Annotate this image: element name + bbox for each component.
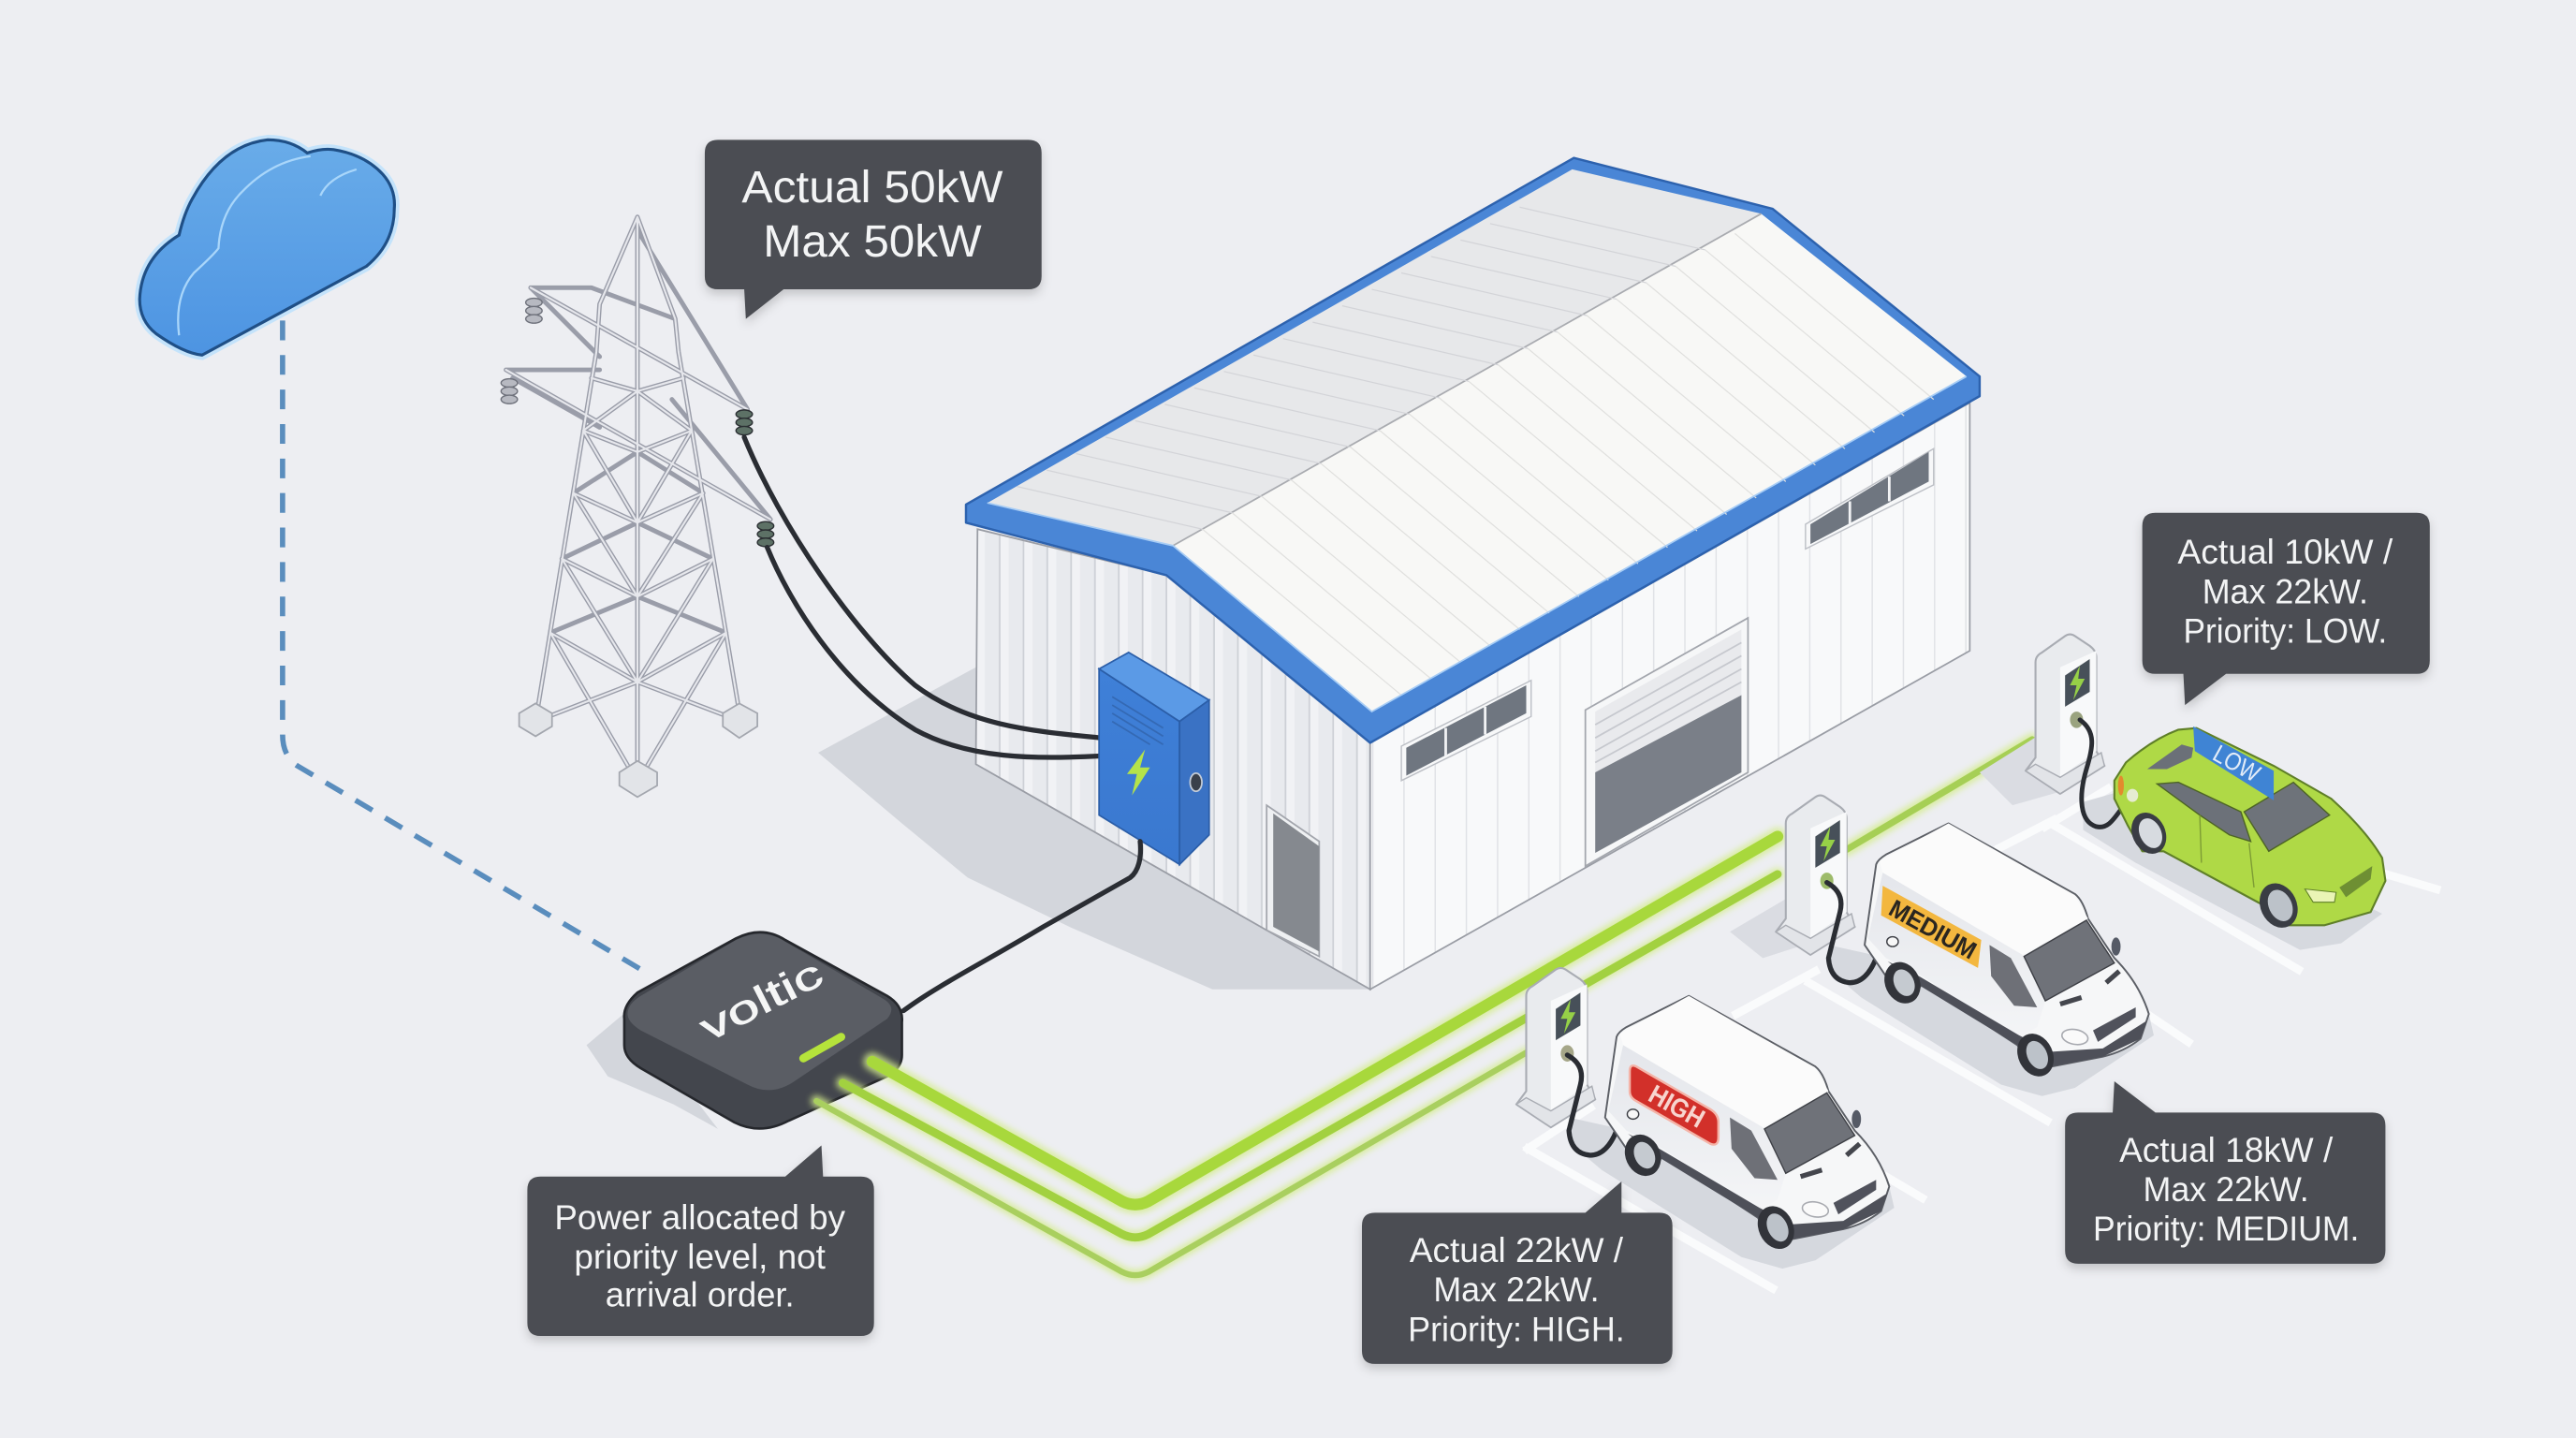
green glow xyxy=(816,740,2032,1275)
callout: allocation note: Power allocated by xyxy=(554,1198,846,1237)
priority sign LOW: LOW xyxy=(2208,740,2265,787)
line to medium priority xyxy=(842,874,1778,1238)
tower lattice xyxy=(506,217,770,783)
building shadow xyxy=(818,668,1370,990)
callout: grid power xyxy=(705,139,1042,319)
line to low priority xyxy=(872,836,1778,1205)
green car xyxy=(2115,726,2385,934)
plug xyxy=(2127,789,2138,802)
wheels xyxy=(2125,807,2305,934)
callout: allocation note: priority level, not xyxy=(574,1238,826,1276)
charging bay medium: charger and van xyxy=(1730,796,2154,1096)
grille xyxy=(2339,866,2372,897)
tower highlights xyxy=(506,217,770,783)
callout: medium priority charger: Actual 18kW / xyxy=(2119,1131,2334,1169)
callout: medium priority charger xyxy=(2065,1081,2385,1264)
status light xyxy=(803,1037,842,1058)
van shadow xyxy=(1569,1118,1895,1269)
priority badge HIGH xyxy=(1630,1065,1719,1145)
charger shadow xyxy=(1730,899,1804,958)
panel lock xyxy=(1190,773,1202,791)
right wall xyxy=(1370,403,1969,990)
parking bay lines xyxy=(1528,789,2437,1288)
callout: high priority charger xyxy=(1362,1181,1673,1364)
priority badge HIGH: HIGH xyxy=(1644,1079,1709,1134)
insulators right xyxy=(736,410,774,547)
tail light xyxy=(2118,776,2124,796)
callout: grid power: Actual 50kW xyxy=(741,162,1003,213)
left wall xyxy=(976,529,1370,990)
callout: medium priority charger: Max 22kW. xyxy=(2144,1170,2309,1209)
icon: lightning bolt xyxy=(1127,749,1150,796)
callout: grid power: Max 50kW xyxy=(763,216,982,267)
charger 3 xyxy=(2026,635,2104,794)
callout: low priority charger: Priority: LOW. xyxy=(2184,611,2387,650)
warehouse building xyxy=(966,158,1980,990)
headlight xyxy=(2305,889,2336,902)
roof xyxy=(966,158,1980,742)
controller logo: voltic xyxy=(693,951,829,1049)
van shadow xyxy=(1828,945,2154,1096)
white van 1 xyxy=(1605,996,1889,1255)
priority sign LOW xyxy=(2193,726,2274,800)
callout: allocation note xyxy=(527,1145,874,1336)
door lines xyxy=(2200,815,2254,888)
charging bay low: charger and car xyxy=(1980,635,2385,950)
charging bay high: charger and van xyxy=(1516,968,1895,1269)
callout: allocation note: arrival order. xyxy=(606,1275,795,1313)
icon: cloud xyxy=(139,139,394,355)
power cables: tower to panel xyxy=(744,437,1101,757)
right windows xyxy=(1806,448,1934,549)
garage door xyxy=(1586,618,1748,866)
charge cable 2 xyxy=(1827,883,1891,983)
callout: low priority charger: Actual 10kW / xyxy=(2177,533,2393,571)
electrical panel xyxy=(1099,653,1209,864)
charger 3 shadow xyxy=(1980,736,2070,805)
charge cable 3 xyxy=(2080,720,2130,827)
callout: high priority charger: Actual 22kW / xyxy=(1410,1231,1624,1269)
transmission tower xyxy=(501,217,774,797)
connection: dashed cloud link xyxy=(283,320,652,976)
callout: high priority charger: Priority: HIGH. xyxy=(1408,1310,1625,1348)
tower footings xyxy=(520,703,757,797)
controller device xyxy=(624,932,902,1128)
callout: high priority charger: Max 22kW. xyxy=(1433,1270,1600,1309)
charge cable 1 xyxy=(1567,1055,1632,1155)
callout: low priority charger xyxy=(2143,513,2430,705)
controller shadow xyxy=(587,1011,718,1129)
line to high priority xyxy=(816,1051,1528,1275)
side door xyxy=(1266,805,1319,957)
green power lines xyxy=(816,740,2032,1275)
power cable: panel to controller xyxy=(903,842,1140,1011)
callout: low priority charger: Max 22kW. xyxy=(2203,572,2368,610)
car shadow xyxy=(2083,789,2382,950)
front windows xyxy=(1401,681,1531,781)
charger 1 xyxy=(1516,968,1595,1127)
charger 2 xyxy=(1776,796,1855,955)
insulators left xyxy=(501,299,542,404)
line continuation xyxy=(1847,740,2032,850)
callout: medium priority charger: Priority: MEDIUM. xyxy=(2093,1210,2359,1248)
priority badge MEDIUM: MEDIUM xyxy=(1884,894,1982,964)
white van 2 xyxy=(1865,823,2149,1082)
